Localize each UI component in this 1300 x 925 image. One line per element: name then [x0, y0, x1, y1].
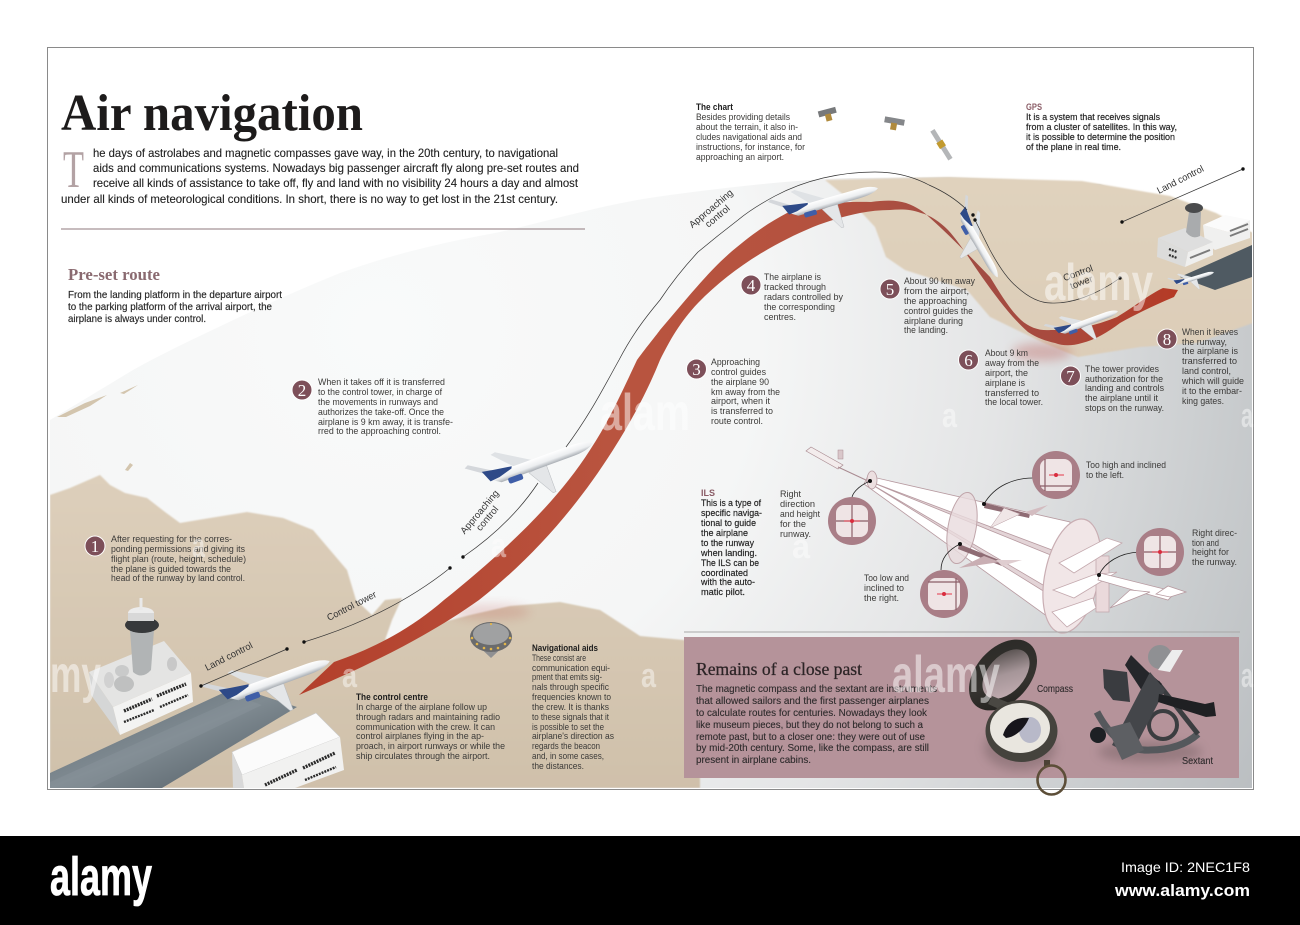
watermark: a [792, 528, 811, 566]
panel text: remote past, but to a closer one: they were out of use [696, 732, 925, 743]
ILS text: tional to guide [701, 517, 756, 528]
step 2: airplane is 9 km away, it is transfe- [318, 416, 453, 427]
step 2 [292, 376, 453, 436]
ILS marker plates [1052, 538, 1122, 627]
panel heading: Remains of a close past [696, 659, 862, 679]
intro text block: he days of astrolabes and magnetic compasses gave way, in the 20th century, to navigational [93, 146, 558, 160]
panel text: The magnetic compass and the sextant are instruments [696, 684, 937, 695]
pre-set route text: From the landing platform in the departure airport [68, 290, 282, 301]
ILS caption: right direction near: runway. [780, 528, 811, 539]
control points [199, 167, 1245, 688]
step 1: the plane is guided towards the [111, 563, 231, 574]
step 7: 7 [1066, 367, 1075, 386]
compass label: Compass [1037, 684, 1073, 695]
the control centre text [356, 692, 505, 761]
page frame [48, 48, 1254, 790]
watermark: alamy [892, 646, 1000, 704]
runway: departure [50, 687, 297, 788]
step 3: is transferred to [711, 405, 773, 416]
airplane: en route [768, 186, 878, 228]
step 1: After requesting for the corres- [111, 533, 232, 544]
the control centre text: The control centre [356, 692, 428, 703]
step 2: authorizes the take-off. Once the [318, 406, 444, 417]
route label: control tower (arrival): tower [1069, 274, 1095, 292]
land: departure continent [50, 475, 700, 788]
navigational aids text: frequencies known to [532, 691, 611, 702]
ILS text: coordinated [701, 567, 748, 578]
navigational aids text [532, 643, 614, 771]
route label: land control (departure): Land control [203, 640, 255, 674]
navigational aids text: the crew. It is thanks [532, 701, 609, 712]
GPS text: of the plane in real time. [1026, 141, 1121, 152]
step 1: ponding permissions and giving its [111, 543, 245, 554]
step 5: the landing. [904, 324, 948, 335]
step 4: 4 [747, 276, 756, 295]
step 3: route control. [711, 415, 763, 426]
ILS second disc [1034, 514, 1110, 638]
panel text: present in airplane cabins. [696, 755, 811, 766]
GPS text: It is a system that receives signals [1026, 111, 1160, 122]
panel text: to calculate routes for centuries. Nowadays they look [696, 708, 928, 719]
instrument: too high and left [1032, 451, 1080, 499]
route label: control tower (arrival): Control [1062, 263, 1095, 284]
map illustration: globe and land [50, 167, 1253, 788]
the control centre text: through radars and maintaining radio [356, 711, 500, 722]
title: Air navigation [61, 85, 363, 142]
control lines: take-off side [201, 169, 1243, 686]
step 3: the airplane 90 [711, 376, 769, 387]
step 6 [958, 347, 1043, 407]
step 3: 3 [692, 360, 701, 379]
footer image id: Image ID: 2NEC1F8 [1121, 859, 1250, 875]
instrument: too low and right [920, 570, 968, 618]
airplane: descending [960, 194, 998, 278]
footer bar [0, 836, 1300, 925]
watermark [50, 254, 1254, 704]
step 3: airport, when it [711, 395, 770, 406]
flight path ribbon [299, 201, 1178, 695]
ILS text: to the runway [701, 537, 754, 548]
navigational aids text: the distances. [532, 760, 584, 771]
step 7: The tower provides [1085, 363, 1159, 374]
ILS beam cone [864, 471, 1070, 630]
airplane: on departure runway [202, 660, 330, 711]
drop cap: T [63, 141, 84, 199]
route label: land control (arrival): Land control [1155, 164, 1206, 197]
watermark: a [1241, 397, 1254, 435]
step 6: transferred to [985, 387, 1039, 398]
step 5 [880, 275, 975, 335]
ILS text: with the auto- [700, 576, 755, 587]
step 4 [741, 271, 843, 322]
GPS text: it is possible to determine the position [1026, 131, 1175, 142]
route label: approaching control (cruise): Approaching [687, 188, 736, 231]
navigational aids text: and, in some cases, [532, 750, 604, 761]
ILS text: the airplane [701, 527, 748, 538]
ILS caption: too low: Too low and [864, 572, 909, 583]
ILS text [700, 488, 762, 597]
instrument: right direction far [1136, 528, 1184, 576]
step 7 [1060, 363, 1164, 413]
step 8: the runway, [1182, 336, 1227, 347]
ILS caption: right direction near: and height [780, 508, 820, 519]
step 4: The airplane is [764, 271, 821, 282]
step 6: airport, the [985, 367, 1028, 378]
watermark: my [50, 646, 101, 704]
airplane: climbing [464, 444, 592, 493]
step 2: rred to the approaching control. [318, 425, 441, 436]
step 4: centres. [764, 311, 796, 322]
ILS text: The ILS can be [701, 557, 759, 568]
satellite 2 [883, 116, 905, 132]
navigational aids text: to these signals that it [532, 711, 609, 722]
the chart text [696, 102, 805, 162]
watermark: a [491, 527, 507, 565]
ILS caption: right direction near [780, 488, 820, 539]
watermark: alamy [1044, 254, 1153, 312]
step 2: to the control tower, in charge of [318, 386, 442, 397]
ribbon shadow [1012, 343, 1072, 361]
step 1: flight plan (route, height, schedule) [111, 553, 246, 564]
intro text block [61, 141, 579, 206]
step 8: When it leaves [1182, 326, 1238, 337]
panel text: by mid-20th century. Some, like the compass, are still [696, 743, 929, 754]
step 2: the movements in runways and [318, 396, 438, 407]
intro text block: under all kinds of meteorological conditions. In short, there is no way to get lost in the 21st century. [61, 192, 558, 206]
ILS caption: right direction near: for the [780, 518, 806, 529]
watermark: a [192, 527, 206, 565]
step 1: 1 [91, 537, 99, 556]
the control centre text: proach, in airport runways or while the [356, 740, 505, 751]
step 7: authorization for the [1085, 373, 1163, 384]
footer logo: alamy [50, 847, 152, 907]
ILS caption: too high: Too high and inclined [1086, 459, 1166, 470]
ILS caption: right direction far: height for [1192, 546, 1229, 557]
ILS caption: too high: to the left. [1086, 469, 1124, 480]
step 3 [686, 356, 780, 426]
panel text: that allowed sailors and the first passenger airplanes [696, 696, 929, 707]
step 6: About 9 km [985, 347, 1028, 358]
airplane: final approach [1044, 310, 1118, 340]
navigational aids text: These consist are [532, 652, 586, 663]
navigational aids text: regards the beacon [532, 740, 600, 751]
GPS text [1026, 102, 1177, 152]
intro text block: aids and communications systems. Nowadays big passenger aircraft fly along pre-set routes and [93, 161, 579, 175]
the chart text: approaching an airport. [696, 151, 784, 162]
intro text block: receive all kinds of assistance to take off, fly and land with no visibility 24 hours a day and almost [93, 176, 579, 190]
route label: approaching control (climb): control [474, 504, 501, 533]
step 5: About 90 km away [904, 275, 975, 286]
ILS upper airplane [984, 503, 1048, 528]
step 5: control guides the [904, 305, 973, 316]
step 5: from the airport, [904, 285, 969, 296]
step 6: away from the [985, 357, 1039, 368]
airplane: on arrival runway [1168, 272, 1214, 290]
ILS caption: too high [1086, 459, 1166, 480]
GPS text: GPS [1026, 102, 1042, 113]
icon: compass [956, 626, 1066, 794]
land: arrival continent [825, 177, 1253, 357]
ILS caption: right direction far [1192, 527, 1237, 567]
navigational aids text: airplane's direction as [532, 730, 614, 741]
sextant label: Sextant [1182, 756, 1213, 767]
watermark: a [942, 397, 958, 435]
pre-set route text: to the parking platform of the arrival airport, the [68, 302, 272, 313]
step 7: the airplane until it [1085, 392, 1158, 403]
route label: approaching control (climb): Approaching [459, 488, 502, 537]
ILS runway and antenna [806, 447, 868, 481]
ILS text: ILS [701, 488, 716, 499]
step 7: stops on the runway. [1085, 402, 1164, 413]
the control centre text: ship circulates through the airport. [356, 750, 490, 761]
the chart text: The chart [696, 102, 734, 113]
step 8: the airplane is [1182, 345, 1238, 356]
step 3: km away from the [711, 386, 780, 397]
panel background [684, 637, 1239, 778]
icon: sextant [1090, 645, 1216, 763]
step 3: Approaching [711, 356, 760, 367]
ILS caption: right direction near: Right [780, 488, 801, 499]
navigational aids text: nals through specific [532, 681, 609, 692]
satellite 1 [818, 107, 838, 123]
ILS caption: too low: inclined to [864, 582, 904, 593]
ILS text: This is a type of [701, 497, 761, 508]
ILS caption: right direction far: tion and [1192, 537, 1219, 548]
ILS text: when landing. [700, 547, 757, 558]
step 7: landing and controls [1085, 382, 1164, 393]
step 1: head of the runway by land control. [111, 572, 245, 583]
the control centre text: In charge of the airplane follow up [356, 701, 487, 712]
route label: control tower (departure): Control tower [325, 589, 379, 624]
footer url: www.alamy.com [1114, 881, 1250, 900]
step 5: the approaching [904, 295, 967, 306]
route label: control tower (arrival) [1062, 263, 1098, 294]
lower building [232, 713, 344, 788]
step 8: which will guide [1181, 375, 1244, 386]
navigational aids text: communication equi- [532, 662, 610, 673]
watermark: a [342, 657, 358, 695]
ILS leader points [868, 479, 1101, 577]
ILS caption: too low [864, 572, 909, 603]
ILS caption: right direction near: direction [780, 498, 815, 509]
land: small islands [57, 385, 138, 471]
GPS text: from a cluster of satellites. In this way, [1026, 121, 1177, 132]
watermark: alam [600, 384, 690, 442]
ILS caption: right direction far: the runway. [1192, 556, 1237, 567]
pre-set route heading: Pre-set route [68, 265, 160, 284]
step 4: radars controlled by [764, 291, 843, 302]
control centre building with tower [89, 598, 193, 735]
ILS diagram [806, 447, 1186, 638]
the chart text: about the terrain, it also in- [696, 121, 798, 132]
step 8: king gates. [1182, 395, 1224, 406]
the chart text: cludes navigational aids and [696, 131, 802, 142]
step 5: 5 [886, 280, 894, 299]
the chart text: instructions, for instance, for [696, 141, 805, 152]
ILS text: matic pilot. [701, 586, 745, 597]
the control centre text: control airplanes flying in the ap- [356, 730, 484, 741]
navigational aids text: Navigational aids [532, 643, 598, 654]
route label: approaching control (cruise): control [703, 203, 732, 230]
globe surface [50, 177, 1253, 788]
watermark: a [641, 657, 657, 695]
step 5: airplane during [904, 315, 963, 326]
navigational aids text: pment that emits sig- [532, 671, 602, 682]
navigational aids text: is possible to set the [532, 721, 604, 732]
ILS caption: too low: the right. [864, 592, 899, 603]
the chart text: Besides providing details [696, 111, 790, 122]
pre-set route text: airplane is always under control. [68, 314, 206, 325]
panel: remains of a close past [684, 626, 1239, 794]
ILS caption: right direction far: Right direc- [1192, 527, 1237, 538]
right airport buildings [1157, 203, 1250, 267]
step 3: control guides [711, 366, 766, 377]
runway: arrival [1180, 245, 1252, 290]
step 8: land control, [1182, 365, 1231, 376]
step 2: 2 [298, 381, 306, 400]
ribbon shadow lower [450, 604, 530, 620]
pre-set route text [68, 290, 282, 325]
step 6: the local tower. [985, 396, 1043, 407]
step 6: airplane is [985, 377, 1025, 388]
panel text: like museum pieces, but they do not belong to such a [696, 720, 923, 731]
step 8: transferred to [1182, 355, 1237, 366]
satellite 3 [929, 128, 953, 161]
navigational beacon [470, 622, 512, 658]
step 1 [85, 533, 246, 583]
ILS leader lines [852, 478, 1139, 575]
step 6: 6 [964, 351, 973, 370]
ILS text: specific naviga- [701, 507, 762, 518]
step 2: When it takes off it is transferred [318, 376, 445, 387]
watermark: a [1241, 657, 1254, 695]
step 8: 8 [1163, 330, 1171, 349]
ILS lower airplane [958, 544, 1022, 568]
step 8 [1157, 326, 1244, 406]
step 4: the corresponding [764, 301, 835, 312]
panel text [696, 684, 937, 766]
ILS far airplane [1098, 573, 1186, 608]
step 4: tracked through [764, 281, 826, 292]
the control centre text: communication with the crew. It can [356, 721, 495, 732]
ILS first disc [942, 490, 982, 566]
step 8: it to the embar- [1182, 385, 1242, 396]
instrument: right direction near runway [828, 497, 876, 545]
